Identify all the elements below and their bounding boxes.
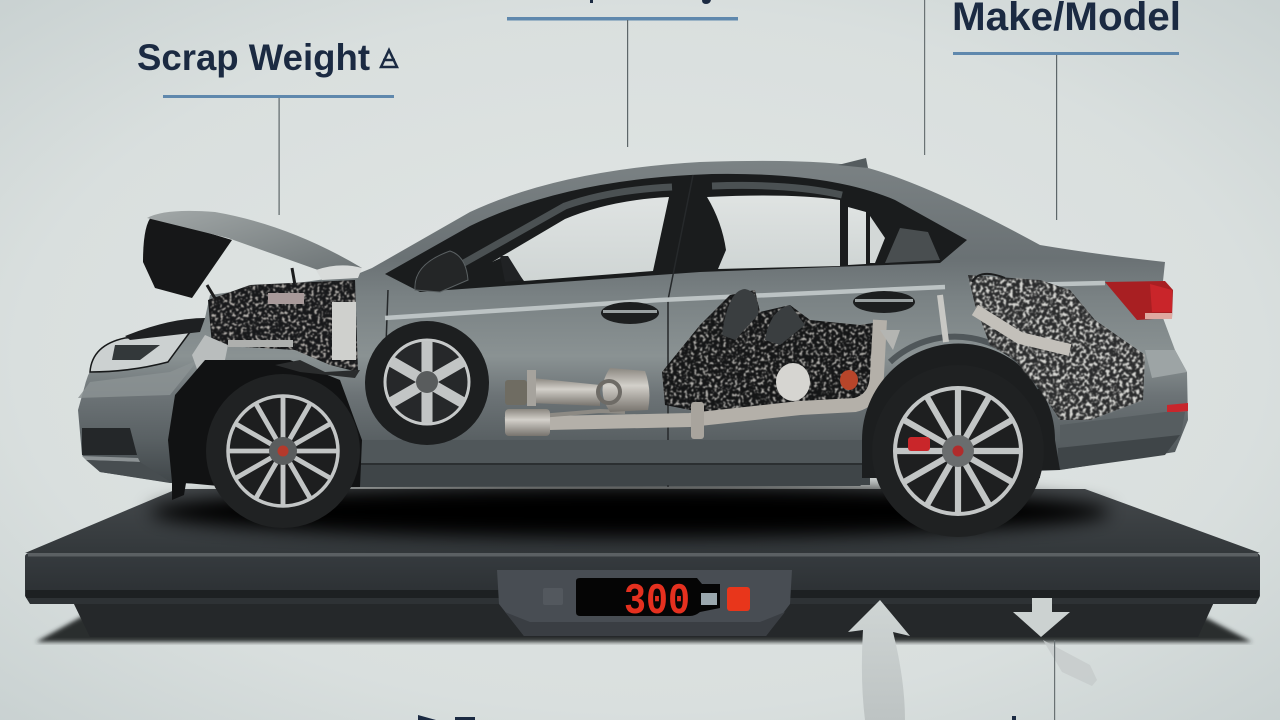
platform top surface bbox=[25, 489, 1260, 553]
car bbox=[78, 158, 1188, 537]
hood line bbox=[125, 318, 205, 340]
quarter glass bbox=[848, 207, 866, 265]
middle wheel bbox=[365, 321, 489, 445]
front engine dark mass bbox=[208, 280, 358, 372]
rear dark mass bbox=[968, 275, 1145, 420]
door handle: front bbox=[601, 302, 659, 324]
weighing platform bbox=[25, 486, 1260, 642]
red button bbox=[727, 587, 750, 611]
arrow: up bbox=[848, 600, 910, 720]
hose bar bbox=[228, 340, 293, 347]
flange bbox=[527, 370, 536, 406]
rear reflector bbox=[1167, 403, 1188, 413]
door handle: rear bbox=[853, 291, 915, 313]
icon: scale weight bbox=[381, 50, 397, 67]
front engine speckle bbox=[208, 280, 358, 372]
hood strut bbox=[207, 268, 295, 300]
cover plate bbox=[268, 293, 304, 304]
headlight detail bbox=[112, 345, 160, 360]
underline and leader: Scrap Weight bbox=[163, 95, 394, 215]
catalytic canister bbox=[602, 368, 649, 412]
rear silencer block bbox=[505, 409, 550, 436]
front seat bbox=[500, 256, 523, 282]
lower sill bbox=[360, 440, 870, 485]
torn fender bbox=[192, 335, 228, 372]
turbo bbox=[776, 363, 810, 401]
label: Scrap Weight bbox=[137, 37, 397, 215]
car body bbox=[78, 161, 1188, 487]
rear cutaway bbox=[880, 274, 1145, 420]
weight reading: 300 bbox=[624, 577, 690, 627]
rear deck light panel bbox=[1145, 350, 1187, 378]
pipe clamp bbox=[691, 402, 704, 439]
inner window trim bbox=[455, 185, 842, 268]
hood latch bbox=[316, 265, 362, 280]
rear door glass bbox=[707, 196, 840, 269]
underline and leader: Make/Model bbox=[953, 52, 1179, 220]
hood panel bbox=[147, 211, 362, 274]
engine speckle bbox=[662, 290, 880, 412]
platform front face bbox=[25, 553, 1260, 604]
engine dark mass bbox=[662, 290, 880, 412]
arrow: down bbox=[1013, 598, 1097, 720]
display screen bbox=[576, 578, 720, 616]
roof antenna bbox=[838, 158, 868, 168]
centre drivetrain bbox=[505, 289, 880, 439]
scale display bbox=[497, 570, 792, 636]
quarter panel under pipe bbox=[880, 330, 900, 350]
clipped bottom text bbox=[418, 715, 1016, 720]
leader: top centre-right bbox=[924, 0, 925, 155]
bonnet strut mount bbox=[275, 360, 360, 378]
brake caliper bbox=[908, 437, 930, 451]
front wheel bbox=[206, 374, 360, 528]
light bracket bbox=[332, 302, 356, 360]
label: Scrap Weight: Scrap Weight bbox=[137, 37, 370, 78]
side mirror bbox=[415, 251, 468, 292]
label: clipped top heading with leader bbox=[507, 0, 738, 147]
front wheel arch bbox=[168, 360, 362, 500]
front bumper intake bbox=[82, 428, 172, 483]
floor shadow bbox=[36, 612, 1252, 642]
muffler tube bbox=[532, 378, 600, 406]
small icon bbox=[701, 593, 717, 605]
platform feet bbox=[72, 600, 1215, 637]
character line bbox=[385, 283, 1105, 318]
door seam bbox=[386, 175, 693, 487]
label: Make/Model bbox=[952, 0, 1181, 220]
front bumper top bbox=[78, 360, 198, 398]
pillar strip bbox=[940, 295, 946, 342]
tail light bbox=[1105, 281, 1173, 320]
hood underside bbox=[143, 216, 232, 298]
red component bbox=[840, 370, 858, 390]
rear pipe bbox=[975, 310, 1070, 350]
front door glass bbox=[492, 197, 669, 281]
headlight bbox=[90, 332, 190, 372]
shadow of car bbox=[150, 486, 1110, 538]
front engine bay bbox=[192, 280, 358, 372]
rear seat silhouette bbox=[885, 228, 940, 263]
rear speckle bbox=[968, 275, 1145, 420]
hose loop bbox=[972, 274, 1005, 282]
rear wheel bbox=[872, 365, 1044, 537]
arch trim bbox=[890, 337, 1040, 388]
dim badge bbox=[543, 588, 563, 605]
rear bumper bbox=[1058, 412, 1185, 470]
seat-like cover bbox=[722, 289, 805, 345]
display housing bbox=[497, 570, 792, 636]
open hood bbox=[143, 211, 362, 300]
exhaust pipe bbox=[505, 320, 880, 424]
window surround bbox=[385, 174, 967, 292]
rear wheel arch bbox=[862, 344, 1060, 478]
